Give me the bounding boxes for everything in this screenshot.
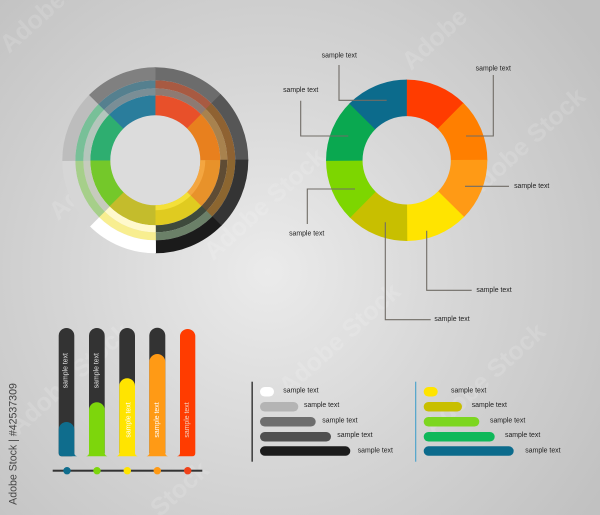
bar 3: yellow: sample text	[126, 402, 132, 438]
list: greyscale bars	[252, 382, 393, 462]
callout: donut top right	[466, 66, 511, 136]
segment: olive	[69, 74, 242, 247]
bar 2: lime: sample text	[93, 353, 100, 388]
item 4: sample text	[337, 432, 373, 439]
item 4: sample text	[505, 432, 540, 439]
timeline axis with dots	[53, 467, 202, 474]
callout: donut top right: sample text	[476, 66, 511, 72]
callout: donut top left	[322, 52, 387, 100]
callout: donut top left: sample text	[322, 52, 357, 60]
item 3	[260, 417, 358, 426]
watermark: Adobe Stock diagonal text: Adobe Stock	[274, 277, 406, 401]
watermark: Adobe Stock diagonal text: Adobe Stock	[199, 142, 331, 266]
watermark: Adobe Stock diagonal text: Adobe Stock	[459, 82, 591, 206]
watermark: Adobe Stock diagonal text: Adobe Stock	[419, 317, 551, 441]
chart: donut chart	[318, 72, 495, 249]
callout: donut left	[283, 87, 348, 136]
item 3: sample text	[490, 418, 525, 424]
callout: donut left: sample text	[283, 87, 318, 94]
stock id vertical text: Adobe Stock | #42537309	[8, 383, 20, 505]
item 5: sample text	[358, 448, 393, 454]
item 3: sample text	[322, 418, 358, 424]
callout: donut lower left	[289, 189, 355, 238]
item 1	[260, 387, 319, 396]
bar chart: vertical rounded bars	[59, 328, 195, 456]
callout: donut bottom: sample text	[434, 316, 470, 323]
bar 4: orange: sample text	[154, 402, 161, 438]
callout: donut right	[465, 183, 549, 190]
item 4	[424, 432, 540, 442]
item 1: sample text	[451, 388, 486, 394]
segment: green	[69, 74, 242, 247]
item 2: sample text	[472, 402, 507, 409]
item 5	[260, 446, 393, 456]
callout: donut bottom right	[427, 231, 512, 294]
ring chart centre disc	[110, 115, 200, 205]
item 2	[424, 402, 507, 412]
bar 5: red: sample text	[184, 402, 191, 438]
bar 1: blue: sample text	[63, 353, 70, 388]
watermark: Adobe Stock diagonal text: Adobe	[396, 3, 473, 75]
watermark: Adobe Stock diagonal text: Adobe Stock	[44, 102, 176, 226]
item 3	[424, 417, 525, 426]
item 2: sample text	[304, 402, 339, 409]
segment: orange	[33, 38, 278, 283]
segment: lime	[33, 38, 278, 283]
watermark: Adobe Stock diagonal text: Adobe Stock	[4, 317, 136, 441]
callout: donut bottom right: sample text	[476, 287, 512, 294]
callout: donut lower left: sample text	[289, 230, 324, 238]
item 5: sample text	[525, 448, 561, 454]
callout: donut right: sample text	[514, 183, 549, 190]
list: coloured bars	[415, 382, 561, 462]
chart: layered ring chart	[33, 38, 278, 283]
segment: red	[69, 74, 242, 247]
item 4	[260, 432, 373, 442]
segment: light orange	[69, 74, 242, 247]
item 5	[424, 446, 561, 456]
segment: yellow	[33, 38, 278, 283]
item 1: sample text	[283, 388, 319, 394]
item 1	[424, 387, 486, 396]
callout: donut bottom	[385, 222, 470, 323]
segment: blue	[33, 38, 278, 283]
item 2	[260, 402, 339, 412]
